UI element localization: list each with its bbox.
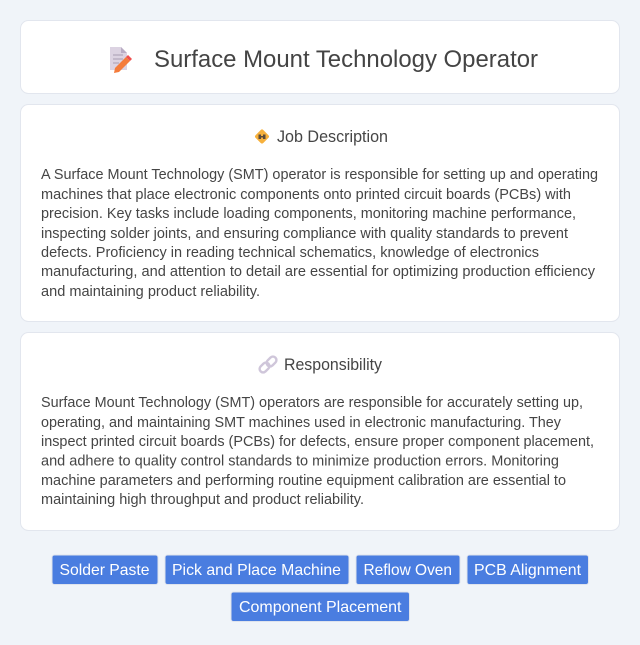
text block: responsibility: and adhere to quality control standards to minimize production errors. Monitoring	[41, 454, 559, 470]
text block: responsibility: operating, and maintaining SMT machines used in electronic manufacturing. They	[41, 415, 562, 431]
text block: job description: machines that place electronic components onto printed circuit boards (PCBs) with	[41, 187, 571, 203]
tag: pcb alignment: PCB Alignment	[474, 562, 582, 579]
text block: job description: inspecting solder joints, and ensuring compliance with quality standards to prevent	[41, 226, 568, 242]
icon: document with pencil	[110, 47, 132, 73]
text block: job description: A Surface Mount Technology (SMT) operator is responsible for setting up and operating	[41, 167, 598, 183]
tag: component placement	[231, 592, 410, 622]
tag: reflow oven: Reflow Oven	[364, 562, 452, 579]
tag: pcb alignment	[467, 555, 588, 584]
panel: responsibility	[20, 332, 620, 530]
text block: job description: and maintaining product reliability.	[41, 284, 260, 300]
tag: pick and place machine: Pick and Place Machine	[172, 562, 341, 579]
panel: job description	[20, 104, 620, 322]
text block: job description	[41, 167, 598, 300]
panel: title header	[20, 20, 620, 94]
text block: responsibility: maintaining high throughput and product reliability.	[41, 492, 364, 508]
icon: chain link	[258, 355, 278, 374]
text block: job description: manufacturing, and attention to detail are essential for optimizing production efficiency	[41, 264, 596, 280]
text block: job description: precision. Key tasks include loading components, monitoring machine performance,	[41, 206, 576, 222]
text block: responsibility: Surface Mount Technology (SMT) operators are responsible for accurately setting up,	[41, 395, 583, 411]
tag: component placement: Component Placement	[239, 599, 402, 616]
tag: reflow oven	[356, 555, 460, 584]
icon: orange diamond	[254, 129, 270, 144]
text block: responsibility: machine parameters and performing routine equipment calibration are essential to	[41, 473, 566, 489]
title: Surface Mount Technology Operator	[154, 46, 538, 73]
tag: solder paste	[52, 555, 158, 584]
heading: job description: Job Description	[277, 128, 388, 146]
text block: job description: defects. Proficiency in reading technical schematics, knowledge of electronics	[41, 245, 539, 261]
text block: responsibility	[41, 395, 594, 508]
heading: responsibility: Responsibility	[284, 356, 383, 374]
text block: responsibility: inspect printed circuit boards (PCBs) for defects, ensure proper component placement,	[41, 434, 594, 450]
tag: pick and place machine	[165, 555, 349, 584]
tag: solder paste: Solder Paste	[60, 562, 150, 579]
